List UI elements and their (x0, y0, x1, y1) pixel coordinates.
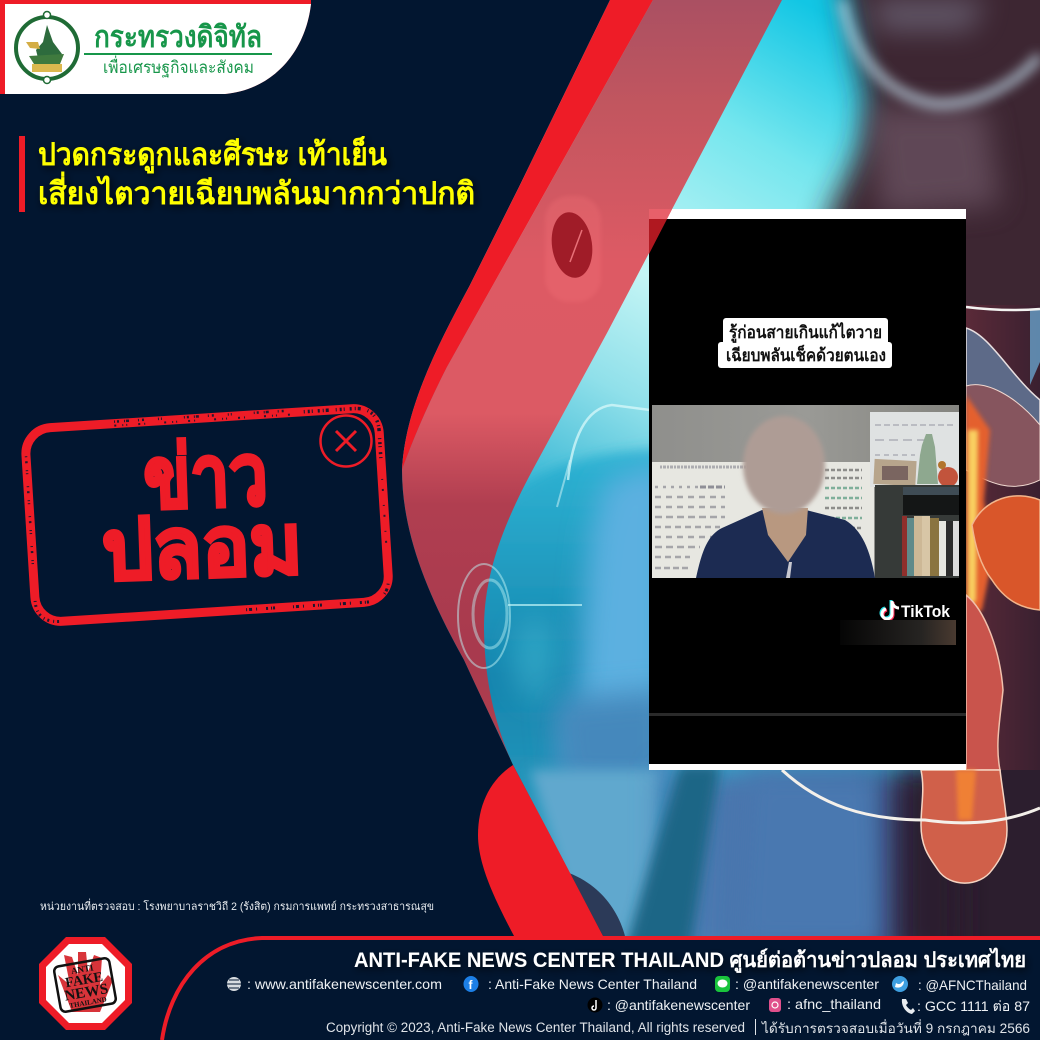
headline: ปวดกระดูกและศีรษะ เท้าเย็น (38, 135, 387, 174)
contact row 1: : www.antifakenewscenter.com (247, 976, 442, 992)
translucent red band (402, 0, 782, 765)
video frame: man with blurred face (652, 405, 959, 578)
video caption (718, 318, 892, 368)
light ring on arm (458, 564, 582, 668)
body illustration: pelvic organs (782, 305, 1040, 883)
stamp text: ข่าว (142, 427, 269, 527)
copyright and verification date (326, 1019, 1030, 1036)
stamp frame (24, 405, 390, 623)
ministry subtitle: เพื่อเศรษฐกิจและสังคม (103, 55, 254, 78)
footer panel (0, 936, 1040, 1040)
sensor circle on arm (545, 196, 601, 302)
contact row 1: : @AFNCThailand (918, 977, 1027, 993)
copyright and verification date: Copyright © 2023, Anti-Fake News Center Thailand, All rights reserved (326, 1020, 745, 1035)
header: ministry logo panel (0, 0, 311, 94)
TikTok logo (881, 600, 950, 621)
headline (19, 135, 475, 212)
red lower shape (478, 765, 603, 936)
footer title: ANTI-FAKE NEWS CENTER THAILAND ศูนย์ต่อต้านข่าวปลอม ประเทศไทย (354, 947, 1026, 974)
red stripe (402, 0, 653, 470)
icon: anti-fake news octagon (39, 937, 132, 1030)
ministry name: กระทรวงดิจิทัล (94, 21, 262, 54)
video screenshot panel (649, 209, 966, 770)
contact row 2 (588, 996, 1030, 1014)
contact row 1: : @antifakenewscenter (735, 976, 879, 992)
TikTok logo: TikTok (901, 602, 950, 621)
copyright and verification date: ได้รับการตรวจสอบเมื่อวันที่ 9 กรกฎาคม 2566 (761, 1019, 1030, 1036)
video caption: เฉียบพลันเช็คด้วยตนเอง (726, 343, 886, 365)
background photo: doctor and body illustration (380, 0, 1040, 960)
icon: anti-fake news octagon: THAILAND (69, 996, 107, 1010)
stamp text: ปลอม (101, 497, 304, 598)
source agency note: หน่วยงานที่ตรวจสอบ : โรงพยาบาลราชวิถี 2 (รังสิต) กรมการแพทย์ กระทรวงสาธารณสุข (40, 898, 434, 913)
blurred username bar (840, 620, 956, 645)
contact row 1 (227, 976, 1027, 993)
icon: anti-fake news octagon: FAKE (64, 970, 104, 991)
icon: anti-fake news octagon: ANTI (70, 962, 95, 976)
stamp text (98, 426, 304, 598)
contact row 1: : Anti-Fake News Center Thailand (488, 976, 697, 992)
headline: เสี่ยงไตวายเฉียบพลันมากกว่าปกติ (38, 171, 475, 211)
fake news stamp (24, 405, 390, 623)
contact row 1: f (468, 978, 474, 992)
icon: anti-fake news octagon: NEWS (63, 981, 110, 1005)
video caption: รู้ก่อนสายเกินแก้ไตวาย (729, 322, 882, 344)
dark navy left panel (0, 0, 610, 936)
icon: ministry emblem (16, 12, 78, 84)
contact row 2: : afnc_thailand (787, 996, 881, 1012)
contact row 2: : GCC 1111 ต่อ 87 (917, 998, 1030, 1014)
icon: cross circle (320, 416, 372, 466)
contact row 2: : @antifakenewscenter (607, 997, 750, 1013)
